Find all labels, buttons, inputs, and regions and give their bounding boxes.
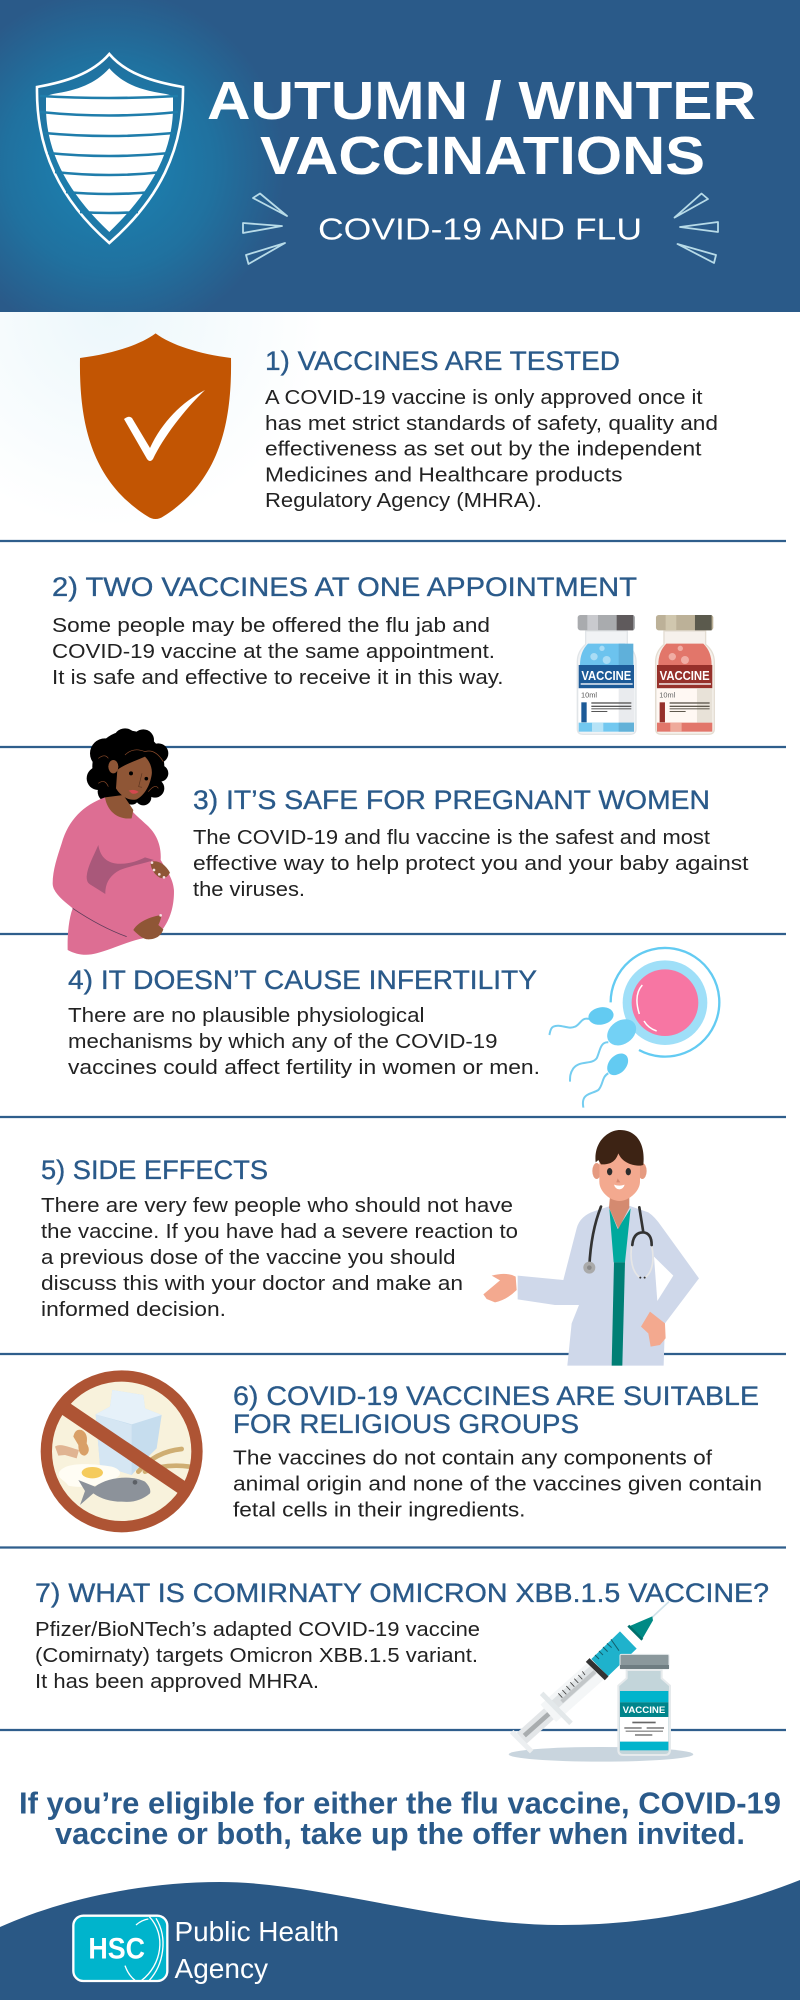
logo: HSC <box>73 1916 167 1981</box>
icon: orange shield with tick <box>80 333 231 519</box>
illustration: pregnant woman <box>53 728 174 955</box>
body text <box>193 827 749 901</box>
body text: COVID-19 vaccine at the same appointment. <box>52 641 495 663</box>
body text: It is safe and effective to receive it in this way. <box>52 667 503 689</box>
icon: no animal products sign <box>46 1376 197 1527</box>
panel: 7 comirnaty omicron vaccine <box>35 1578 769 1762</box>
panel: footer <box>0 1880 800 2000</box>
body text: A COVID-19 vaccine is only approved once it <box>265 387 703 409</box>
body text <box>52 615 503 689</box>
call to action: If you’re eligible for either the flu vaccine, COVID-19 <box>19 1786 781 1820</box>
subtitle: COVID-19 AND FLU <box>318 212 642 246</box>
body text: effectiveness as set out by the independent <box>265 438 702 460</box>
body text: It has been approved MHRA. <box>35 1671 319 1693</box>
title: AUTUMN / WINTER <box>207 71 756 131</box>
body text: There are very few people who should not have <box>41 1195 513 1217</box>
panel: 4 does not cause infertility <box>68 948 719 1108</box>
icon: red vaccine vial: 10ml <box>659 691 676 700</box>
body text: (Comirnaty) targets Omicron XBB.1.5 variant. <box>35 1645 478 1667</box>
body text: a previous dose of the vaccine you should <box>41 1247 456 1269</box>
body text <box>35 1619 480 1693</box>
body text <box>68 1005 540 1079</box>
heading <box>233 1381 759 1439</box>
illustration: syringe and vial: VACCINE <box>623 1705 665 1715</box>
body text <box>233 1448 762 1521</box>
icon: blue vaccine vial: 10ml <box>581 691 597 700</box>
panel: 5 side effects <box>41 1130 699 1366</box>
body text: Some people may be offered the flu jab and <box>52 615 490 637</box>
body text: animal origin and none of the vaccines given contain <box>233 1474 762 1496</box>
heading: 5) SIDE EFFECTS <box>41 1155 268 1185</box>
body text: Medicines and Healthcare products <box>265 464 622 486</box>
body text: the vaccine. If you have had a severe reaction to <box>41 1221 518 1243</box>
body text: The vaccines do not contain any components of <box>233 1448 713 1470</box>
heading: 2) TWO VACCINES AT ONE APPOINTMENT <box>52 572 637 602</box>
illustration: syringe and vial <box>509 1602 693 1762</box>
logo: HSC: HSC <box>88 1932 145 1965</box>
body text: The COVID-19 and flu vaccine is the safest and most <box>193 827 710 849</box>
body text: effective way to help protect you and your baby against <box>193 853 749 875</box>
body text: Regulatory Agency (MHRA). <box>265 490 542 512</box>
heading: 3) IT’S SAFE FOR PREGNANT WOMEN <box>193 785 710 815</box>
body text: Pfizer/BioNTech’s adapted COVID-19 vaccine <box>35 1619 480 1641</box>
icon: striped shield <box>37 54 183 243</box>
body text: vaccines could affect fertility in women or men. <box>68 1057 540 1079</box>
icon: red vaccine vial <box>656 615 714 734</box>
panel: 3 safe for pregnant women <box>53 728 749 955</box>
body text: informed decision. <box>41 1299 226 1321</box>
panel: 6 suitable for religious groups <box>46 1376 762 1527</box>
heading: FOR RELIGIOUS GROUPS <box>233 1409 579 1439</box>
heading: 4) IT DOESN’T CAUSE INFERTILITY <box>68 965 537 995</box>
agency name <box>174 1916 339 1984</box>
title <box>207 71 756 186</box>
icon: blue vaccine vial <box>577 615 636 734</box>
icon: red vaccine vial: VACCINE <box>660 668 710 683</box>
body text: has met strict standards of safety, quality and <box>265 413 718 435</box>
icon: burst rays <box>243 194 718 264</box>
call to action <box>19 1786 781 1851</box>
icon: egg and sperm <box>549 948 719 1108</box>
heading: 1) VACCINES ARE TESTED <box>265 346 620 376</box>
heading: 7) WHAT IS COMIRNATY OMICRON XBB.1.5 VACCINE? <box>35 1578 769 1608</box>
icon: blue vaccine vial: VACCINE <box>581 668 631 683</box>
panel: 1 vaccines are tested <box>80 333 718 519</box>
illustration: doctor <box>483 1130 699 1366</box>
body text: fetal cells in their ingredients. <box>233 1499 526 1521</box>
heading: 6) COVID-19 VACCINES ARE SUITABLE <box>233 1381 759 1411</box>
call to action: vaccine or both, take up the offer when invited. <box>55 1816 745 1851</box>
panel: header banner <box>0 0 800 312</box>
body text: discuss this with your doctor and make an <box>41 1273 463 1295</box>
body text: mechanisms by which any of the COVID-19 <box>68 1031 498 1053</box>
agency name: Agency <box>174 1953 268 1984</box>
body text <box>265 387 718 512</box>
panel: 2 two vaccines at one appointment <box>52 572 714 734</box>
body text: There are no plausible physiological <box>68 1005 424 1027</box>
title: VACCINATIONS <box>260 126 705 186</box>
body text: the viruses. <box>193 879 305 901</box>
agency name: Public Health <box>174 1916 339 1947</box>
body text <box>41 1195 518 1321</box>
